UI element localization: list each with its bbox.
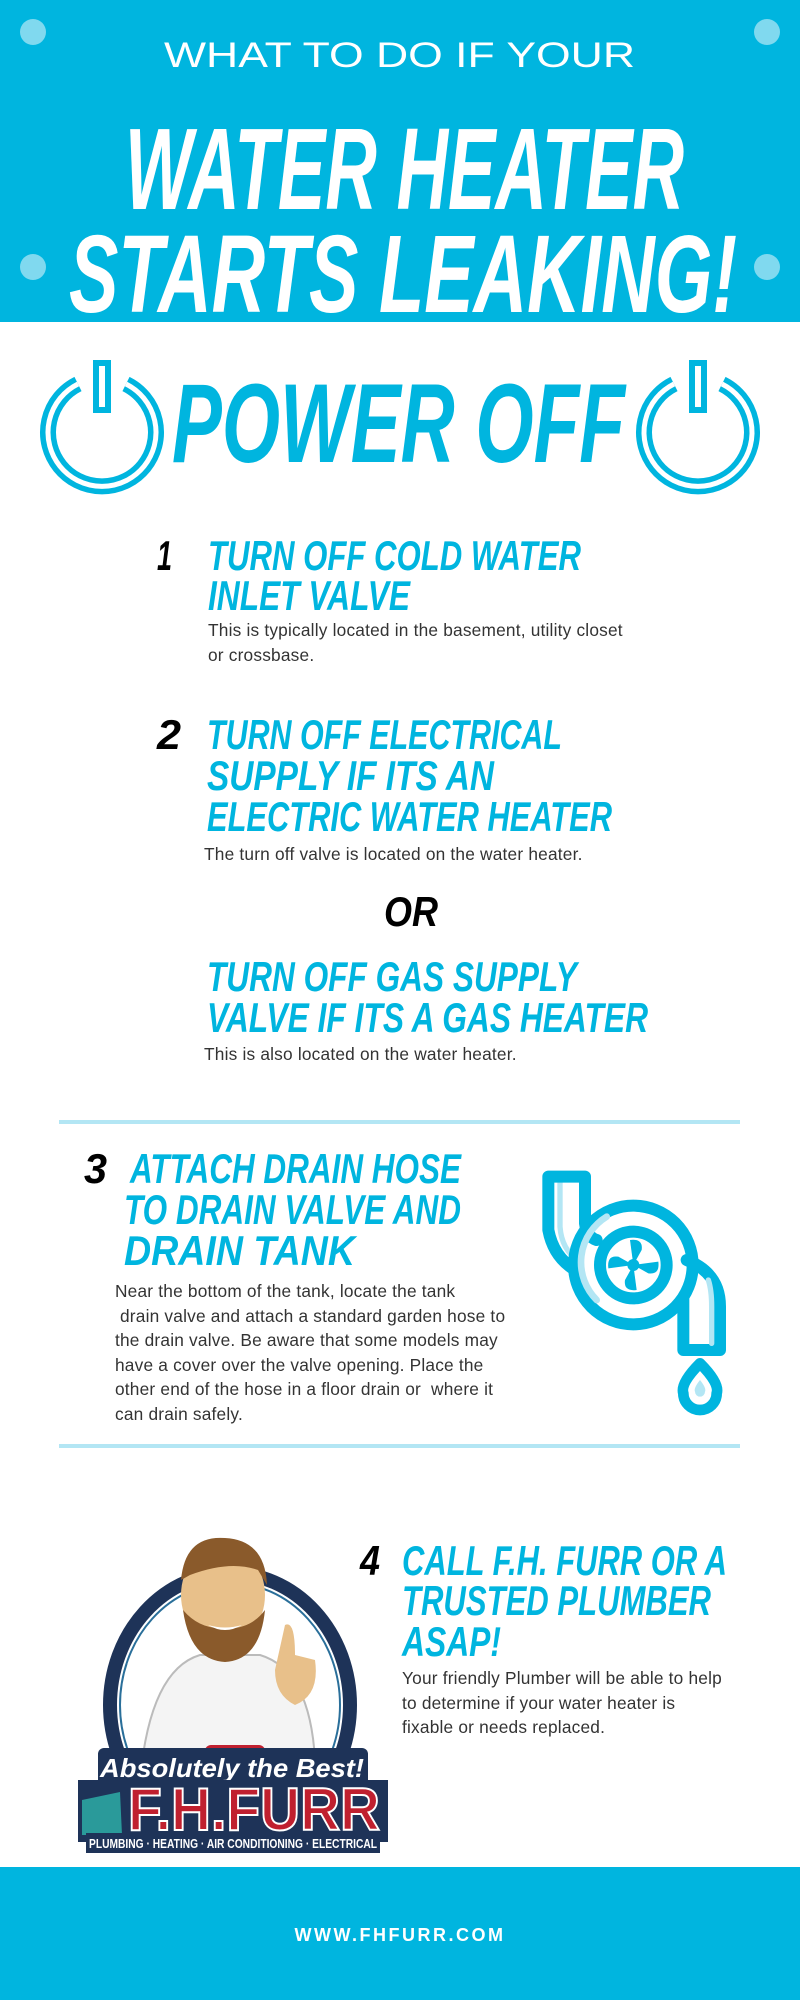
step 3 title: TO DRAIN VALVE AND <box>124 1186 461 1233</box>
step 2 title: TURN OFF ELECTRICAL <box>207 711 562 758</box>
step 3 title: ATTACH DRAIN HOSE <box>129 1145 462 1192</box>
logo: F.H. Furr mascot: Absolutely the Best! <box>99 1753 364 1783</box>
icon: power left <box>48 360 156 486</box>
step 3 body: the drain valve. Be aware that some models may <box>115 1330 498 1350</box>
step 1 body <box>208 620 623 664</box>
OR: OR <box>384 888 439 935</box>
step 2 title: ELECTRIC WATER HEATER <box>207 793 612 840</box>
step 1 title: TURN OFF COLD WATER <box>208 532 581 579</box>
mascot <box>140 1538 316 1780</box>
step 4 body: Your friendly Plumber will be able to help <box>402 1668 722 1688</box>
step 1 title <box>157 532 581 619</box>
step 3 body: drain valve and attach a standard garden hose to <box>120 1306 505 1326</box>
gas title <box>207 953 649 1041</box>
footer <box>0 1867 800 2000</box>
step 1 body: This is typically located in the basement, utility closet <box>208 620 623 640</box>
step 1 title: INLET VALVE <box>208 572 411 619</box>
step 3 title <box>84 1145 462 1274</box>
step 1 title: 1 <box>157 532 172 579</box>
step 3 body: Near the bottom of the tank, locate the tank <box>115 1281 455 1301</box>
step 3 body: have a cover over the valve opening. Place the <box>115 1354 484 1374</box>
step 2 title: SUPPLY IF ITS AN <box>207 752 495 799</box>
header banner <box>0 0 800 322</box>
power off heading <box>40 360 760 494</box>
step 4 title: 4 <box>359 1537 380 1584</box>
step 3 title: 3 <box>84 1145 107 1192</box>
step 3 body: can drain safely. <box>115 1404 243 1424</box>
step 3 body: other end of the hose in a floor drain or where it <box>115 1379 493 1399</box>
step 2 title: 2 <box>156 711 181 758</box>
gas body: This is also located on the water heater. <box>204 1044 517 1064</box>
logo: F.H. Furr mascot: F.H.FURR <box>128 1776 380 1843</box>
logo: F.H. Furr mascot <box>78 1538 388 1853</box>
step 1 body: or crossbase. <box>208 644 314 664</box>
gas title: TURN OFF GAS SUPPLY <box>207 953 580 1000</box>
step 2 body: The turn off valve is located on the water heater. <box>204 844 583 864</box>
icon: drain valve <box>542 1170 726 1416</box>
step 4 title <box>359 1537 727 1665</box>
step 4 title: ASAP! <box>401 1618 501 1665</box>
logo: F.H. Furr mascot: PLUMBING · HEATING · AIR CONDITIONING · ELECTRICAL <box>89 1836 377 1851</box>
subtitle: WHAT TO DO IF YOUR <box>164 36 635 75</box>
step 3 body <box>115 1281 505 1424</box>
step 3 title: DRAIN TANK <box>124 1227 357 1274</box>
step 4 body <box>402 1668 722 1737</box>
icon: power right <box>644 360 752 486</box>
gas title: VALVE IF ITS A GAS HEATER <box>207 994 649 1041</box>
main title <box>69 104 737 336</box>
step 4 body: to determine if your water heater is <box>402 1692 675 1712</box>
decorative dots <box>20 19 780 280</box>
banner text <box>98 1748 368 1788</box>
website: WWW.FHFURR.COM <box>295 1925 505 1945</box>
ring <box>110 1573 350 1837</box>
step 2 title <box>156 711 612 840</box>
step 4 body: fixable or needs replaced. <box>402 1717 605 1737</box>
